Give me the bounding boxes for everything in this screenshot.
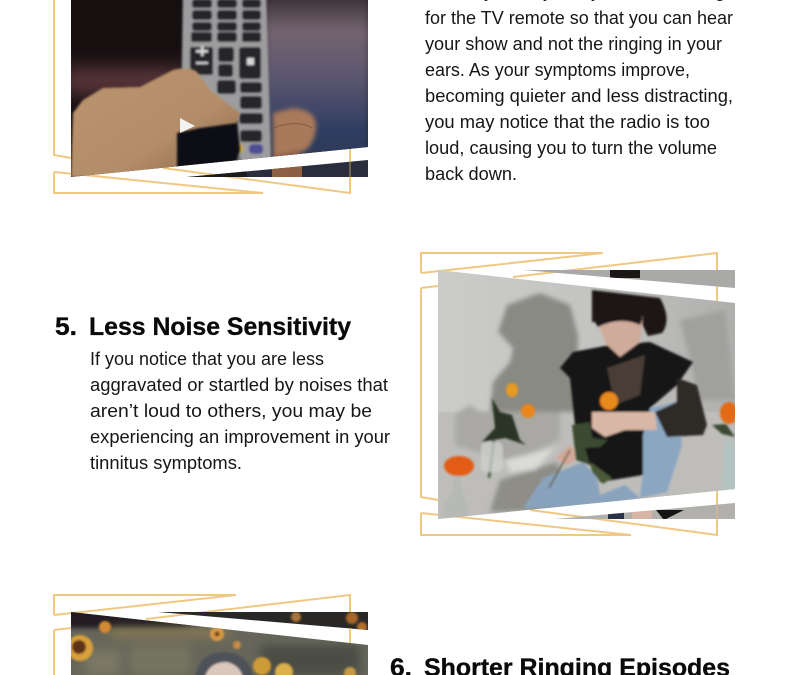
frame: woman photo	[421, 253, 717, 535]
frame: sunflower photo	[54, 595, 350, 675]
text block: item 5 body: aren’t loud to others, you may be	[90, 401, 372, 421]
photo: woman in sunflower field	[71, 612, 368, 675]
heading: 5. Less Noise Sensitivity: Less Noise Sensitivity	[89, 313, 351, 341]
text block: item 4 body	[425, 0, 733, 184]
heading: 5. Less Noise Sensitivity: 5.	[55, 313, 77, 341]
text block: item 5 body: If you notice that you are less	[90, 349, 324, 369]
text block: item 4 body: for the TV remote so that you can hear	[425, 8, 733, 28]
photo: hand holding TV remote	[71, 0, 368, 177]
photo: woman with orange roses	[438, 265, 740, 525]
text block: item 5 body: experiencing an improvement in your	[90, 427, 390, 447]
text block: item 4 body: your show and not the ringing in your	[425, 34, 722, 54]
text block: item 4 body: loud, causing you to turn the volume	[425, 138, 717, 158]
text block: item 5 body	[90, 349, 390, 473]
text block: item 4 body: back down.	[425, 164, 517, 184]
text block: item 4 body: becoming quieter and less distracting,	[425, 86, 733, 106]
text block: item 4 body: you may notice that the radio is too	[425, 112, 710, 132]
text block: item 5 body: tinnitus symptoms.	[90, 453, 242, 473]
text block: item 5 body: aggravated or startled by noises that	[90, 375, 388, 395]
frame: remote photo	[54, 0, 350, 193]
text block: item 4 body: ears. As your symptoms improve,	[425, 60, 690, 80]
